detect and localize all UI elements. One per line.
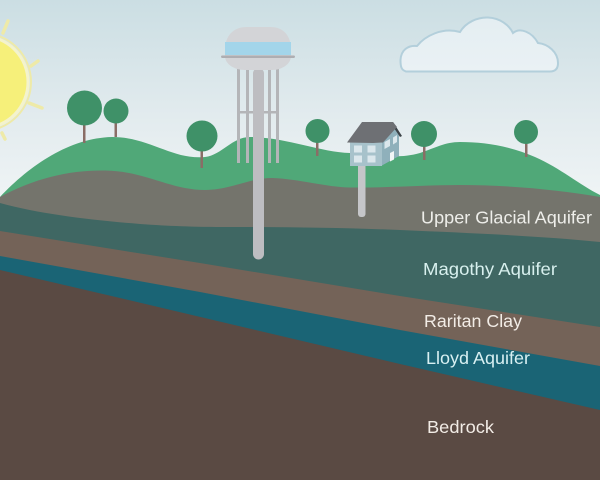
label: Raritan Clay: Raritan Clay <box>424 311 522 331</box>
label: Magothy Aquifer: Magothy Aquifer <box>423 259 557 279</box>
tree 6 <box>514 120 538 157</box>
tree 2 <box>104 98 128 137</box>
windows <box>354 135 397 162</box>
icon: house <box>347 122 402 166</box>
side wall <box>381 124 399 166</box>
front wall <box>350 142 382 166</box>
tree trunks over the hill <box>83 136 528 168</box>
trees <box>67 90 538 168</box>
layer: Lloyd Aquifer <box>0 256 600 440</box>
icon: sun <box>0 21 42 139</box>
label: Bedrock: Bedrock <box>427 417 494 437</box>
water level band <box>225 42 291 55</box>
tree 3 <box>186 120 218 168</box>
layer: Bedrock <box>0 270 600 480</box>
tree 5 <box>411 121 437 160</box>
house well pipe <box>358 163 366 217</box>
tower tank <box>225 27 291 70</box>
label: Upper Glacial Aquifer: Upper Glacial Aquifer <box>421 208 592 228</box>
tree 1 <box>67 90 102 143</box>
label: Lloyd Aquifer: Lloyd Aquifer <box>426 348 530 368</box>
tree 4 <box>306 119 330 156</box>
layer: Raritan Clay <box>0 231 600 400</box>
green hills <box>0 137 600 260</box>
tower legs <box>237 68 279 163</box>
icon: cloud <box>400 17 558 72</box>
water tower <box>221 27 295 260</box>
layer: Upper Glacial Aquifer <box>0 170 600 260</box>
roof edge <box>392 122 402 137</box>
sky background <box>0 0 600 210</box>
tank rim <box>221 56 295 58</box>
tower column <box>253 68 264 260</box>
roof <box>347 122 397 143</box>
layer: Magothy Aquifer <box>0 203 600 340</box>
